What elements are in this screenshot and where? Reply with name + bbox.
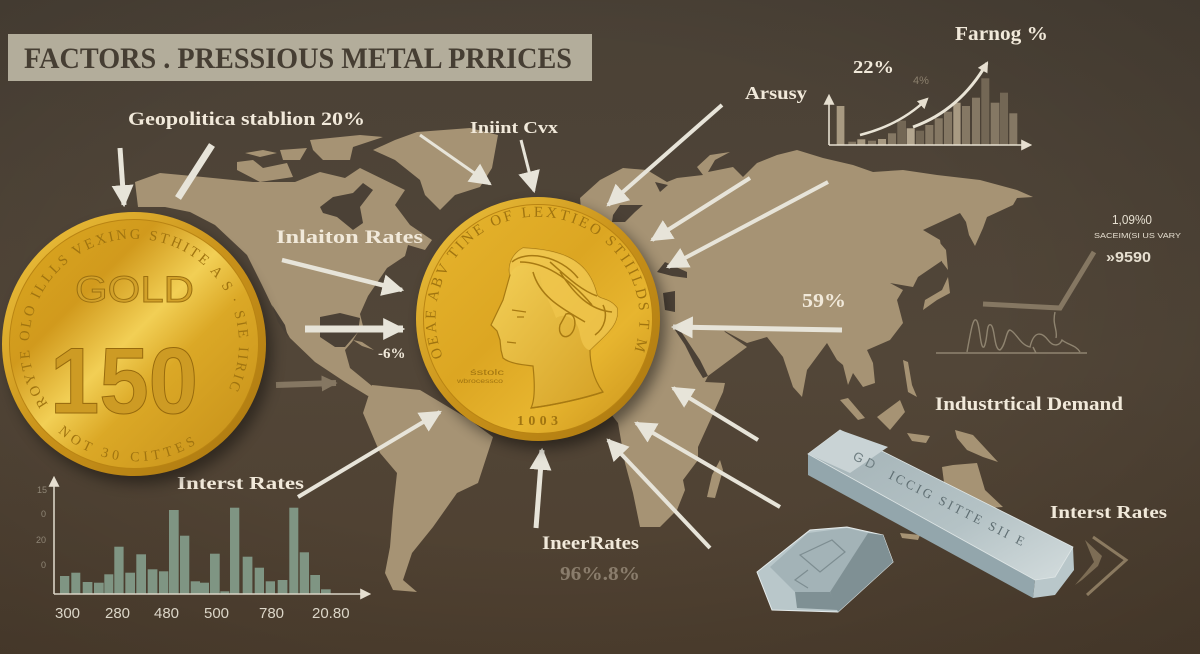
gold coin portrait (416, 197, 660, 441)
value 22 percent: 22% (853, 57, 894, 77)
coin small inscription: śstolc (470, 368, 504, 377)
bar side (808, 454, 1035, 598)
silver nugget (757, 527, 893, 612)
label: arsusy: Arsusy (745, 83, 807, 103)
bar top (808, 430, 1073, 580)
x axis labels: 780 (259, 605, 284, 622)
x axis labels: 500 (204, 605, 229, 622)
map: inland seas (272, 182, 708, 378)
value 1,09 percent: 1,09%0 (1112, 213, 1152, 227)
nugget engraving (795, 540, 845, 588)
label: inflation rates: Inlaiton Rates (276, 227, 423, 248)
label: minus 6 percent: -6% (378, 346, 406, 362)
chevron map fragment (1075, 537, 1126, 595)
world map (135, 128, 1033, 592)
map: Australia (900, 463, 1003, 540)
label: top centre: Iniint Cvx (470, 118, 559, 137)
y axis labels: 15 (37, 485, 47, 495)
coin small inscription two: wbrocessco (456, 379, 504, 385)
y axis labels: 0 (41, 560, 46, 570)
thick arrow strokes (983, 252, 1094, 308)
x axis labels: 280 (105, 605, 130, 622)
label: percent range: 96%.8% (560, 563, 640, 585)
coin date: 1003 (517, 414, 558, 429)
coin shadow centre (422, 204, 666, 448)
map: Madagascar (707, 460, 723, 498)
line chart lower right (936, 213, 1181, 353)
map: Greenland (373, 128, 498, 210)
label: interest rates right: Interst Rates (1050, 502, 1167, 522)
y axis labels: 0 (41, 509, 46, 519)
bar text: ICCIG SITTE SII E (887, 467, 1027, 549)
map: Arctic islands (237, 135, 383, 350)
small caption: SACEIM(SI US VARY (1094, 231, 1181, 240)
label: industrial demand: Industrtical Demand (935, 394, 1123, 415)
trend arrow short (860, 99, 927, 135)
trend arrow long (913, 63, 987, 127)
value 9590: »9590 (1106, 249, 1151, 266)
title banner: FACTORS . PRESSIOUS METAL PRRICES (24, 42, 572, 75)
coin shadow left (8, 220, 272, 484)
chart title: Farnog % (955, 23, 1048, 45)
labels (128, 83, 1167, 585)
bar chart top right (829, 23, 1048, 145)
y axis labels (36, 485, 47, 570)
label: inner rates: IneerRates (542, 533, 639, 554)
x axis labels: 480 (154, 605, 179, 622)
portrait head (491, 248, 617, 408)
x axis labels: 300 (55, 605, 80, 622)
bar chart bottom left (36, 478, 369, 622)
bar stamp: G D (851, 448, 878, 472)
value 4 percent: 4% (913, 75, 929, 87)
silver bar (808, 430, 1074, 598)
map: North America (135, 168, 432, 396)
title banner (8, 34, 592, 81)
bar end block (808, 430, 888, 473)
map: Japan and Sakhalin (923, 243, 950, 310)
arrows (120, 105, 842, 548)
coin number 150: 150 (50, 328, 198, 433)
label: geopolitical: Geopolitica stablion 20% (128, 109, 365, 130)
bar end (1033, 547, 1074, 598)
label: 59 percent: 59% (802, 290, 846, 312)
coin text ring: ROYTE OLO ILLLS VEXING STHITE A S · SIE IIRIC (20, 229, 248, 409)
gold coin 150 (2, 212, 266, 476)
coin bottom text: NOT 30 CITTES (58, 425, 194, 462)
map: Eurasia and Africa (580, 150, 1033, 527)
map: South America (363, 385, 493, 592)
coin word gold: GOLD (75, 269, 194, 310)
x axis labels: 20.80 (312, 605, 350, 622)
map: Southeast Asia islands (840, 360, 998, 462)
label: interest rates left: Interst Rates (177, 473, 304, 493)
x axis labels (55, 605, 350, 622)
y axis labels: 20 (36, 535, 46, 545)
